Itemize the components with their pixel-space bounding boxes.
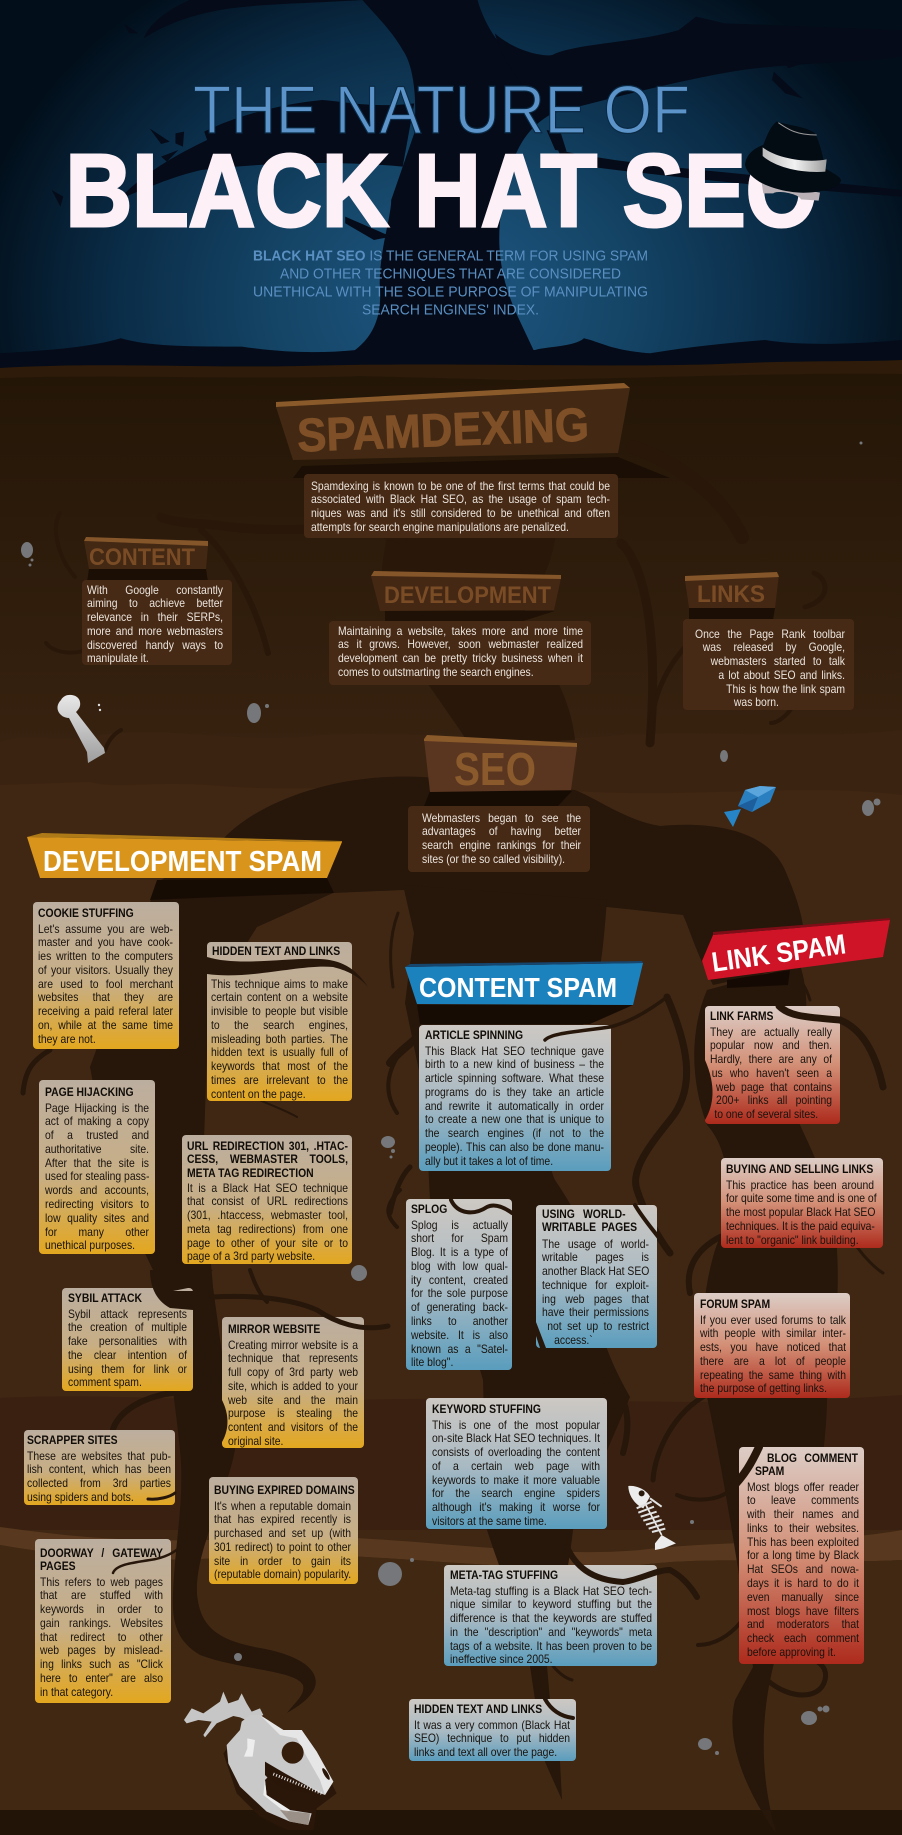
card: url redirection: META TAG REDIRECTION [186, 1166, 313, 1180]
card: doorway / gateway pages: in that category. [40, 1685, 113, 1699]
card: mirror website: original site. [228, 1434, 283, 1448]
card: forum spam: ests, you have noticed that [700, 1340, 846, 1354]
card: url redirection: It is a Black Hat SEO technique [186, 1180, 347, 1194]
sign: seo [424, 735, 577, 806]
card: hidden text and links: This technique aims to make [211, 976, 348, 990]
card: keyword stuffing: on-site Black Hat SEO techniques. It [432, 1431, 600, 1445]
card: blog comment spam: Hat SEOs and nowa- [747, 1562, 859, 1576]
card: splog: short for Spam [411, 1231, 508, 1245]
root tendrils [23, 913, 883, 1695]
text box: development [329, 621, 591, 685]
card: splog: known as a "Satel- [411, 1342, 508, 1356]
sign: content [84, 537, 208, 582]
card: cookie stuffing: ies written to the computers [38, 949, 173, 963]
card: using world-writable pages: ing web pages that [542, 1292, 649, 1306]
card: doorway / gateway pages [35, 1539, 171, 1703]
card: hidden text and links: invisible to people but visible [211, 1004, 348, 1018]
card: blog comment spam: SPAM [755, 1464, 784, 1478]
card: doorway / gateway pages: PAGES [40, 1559, 76, 1573]
intro paragraph [253, 248, 648, 318]
card: meta-tag stuffing: ineffective since 2005. [450, 1652, 553, 1666]
card: cookie stuffing: master and you have cook- [38, 935, 173, 949]
text box: content: more and more webmasters [87, 624, 223, 638]
card: url redirection: page to other of your site or to [186, 1236, 347, 1250]
card: using world-writable pages: WRITABLE PAGES [542, 1220, 637, 1234]
card: blog comment spam: and moderators that [747, 1617, 859, 1631]
card: sybil attack: fake personalities with [68, 1334, 187, 1348]
card: buying and selling links: lent to "organic" link building. [726, 1233, 859, 1247]
card: splog: SPLOG [411, 1202, 447, 1216]
card: doorway / gateway pages: here to enter" are also [40, 1671, 163, 1685]
card: hidden text and links: hidden text is usually full of [211, 1045, 348, 1059]
card: forum spam: there are a lot of people [700, 1354, 846, 1368]
card: doorway / gateway pages: ing links such as "Click [40, 1657, 163, 1671]
card: using world-writable pages: have their permissions [542, 1305, 649, 1319]
card: blog comment spam: This has been exploited [747, 1535, 859, 1549]
text box: development: Maintaining a website, takes more and more time [338, 624, 583, 638]
card: link farms: web page that contains [716, 1080, 832, 1094]
banner: link spam [702, 918, 890, 988]
card: article spinning: ARTICLE SPINNING [425, 1028, 523, 1042]
card: hidden text and links: times are irrelevant to the [211, 1073, 348, 1087]
icon: blue gem [724, 786, 776, 827]
card: using world-writable pages: USING WORLD- [542, 1206, 626, 1220]
card: hidden text and links (content spam): It was a very common (Black Hat [414, 1718, 570, 1732]
card: buying and selling links [721, 1158, 883, 1248]
card: cookie stuffing: receiving a paid referal later [38, 1004, 173, 1018]
icon: black fedora hat [745, 122, 841, 201]
card: scrapper sites [24, 1430, 175, 1505]
card: hidden text and links: misleading both parties. The [211, 1032, 348, 1046]
card: keyword stuffing: for the search engine spiders [432, 1486, 600, 1500]
card: page hijacking: act of making a copy [45, 1114, 149, 1128]
title line: the nature of: THE NATURE OF [193, 72, 690, 148]
card: buying and selling links: BUYING AND SELLING LINKS [726, 1162, 873, 1176]
card: doorway / gateway pages: gain rankings. Websites [40, 1616, 163, 1630]
card: buying expired domains: that has expired recently is [214, 1512, 351, 1526]
upper faint roots [46, 447, 825, 750]
card: using world-writable pages: another Black Hat SEO [542, 1264, 649, 1278]
card: page hijacking: After that the site is [45, 1156, 149, 1170]
card: using world-writable pages [536, 1205, 657, 1348]
card: buying expired domains: BUYING EXPIRED DOMAINS [214, 1482, 355, 1496]
card: forum spam: If you ever used forums to talk [700, 1312, 846, 1326]
card: meta-tag stuffing [444, 1565, 657, 1666]
text box: development: comes to outstmarting the search engines. [338, 665, 534, 679]
banner: development spam [27, 833, 342, 900]
sign: links [685, 572, 779, 620]
card: doorway / gateway pages: that are stuffed with [40, 1588, 163, 1602]
card: buying and selling links: This practice has been around [726, 1178, 874, 1192]
card: blog comment spam: BLOG COMMENT [767, 1450, 858, 1464]
card: keyword stuffing: although it's making it worse for [432, 1500, 600, 1514]
tree silhouette [0, 0, 902, 370]
card: page hijacking: used for stealing pass- [45, 1169, 149, 1183]
text box: content: relevance in their SERPs, [87, 610, 223, 624]
card: sybil attack: the creation of multiple [68, 1320, 187, 1334]
sign: development: DEVELOPMENT [384, 582, 551, 609]
card: blog comment spam: before approving it. [747, 1645, 836, 1659]
card: cookie stuffing: are used to fool merchant [38, 977, 173, 991]
banner: development spam: DEVELOPMENT SPAM [43, 846, 322, 878]
card: article spinning: This Black Hat SEO technique gave [425, 1044, 604, 1058]
text box: content: aiming to achieve better [87, 596, 223, 610]
card: mirror website: purpose is stealing the [228, 1406, 358, 1420]
card: blog comment spam: check each comment [747, 1631, 859, 1645]
text box: seo [408, 806, 590, 872]
card: cookie stuffing [33, 902, 179, 1049]
card: page hijacking [39, 1080, 155, 1254]
card: splog [406, 1199, 512, 1370]
card: forum spam: the purpose of getting links. [700, 1381, 827, 1395]
card: url redirection: (301, .htaccess, webmaster tool, [186, 1208, 347, 1222]
card: cookie stuffing: Let's assume you are web- [38, 922, 173, 936]
card: blog comment spam: to leave comments [747, 1493, 859, 1507]
text box: links: This is how the link spam [726, 682, 845, 696]
text box: content: manipulate it. [87, 651, 149, 665]
card: link farms: They are actually really [710, 1024, 832, 1038]
card: hidden text and links: certain content on a website [211, 990, 348, 1004]
sign: spamdexing [276, 383, 670, 478]
card: page hijacking: redirecting visitors to [45, 1197, 149, 1211]
card: sybil attack: using them for link or [68, 1362, 187, 1376]
card: forum spam: FORUM SPAM [700, 1296, 770, 1310]
card: keyword stuffing: This is one of the most popular [432, 1418, 600, 1432]
card: scrapper sites: using spiders and bots. [27, 1490, 134, 1504]
card: sybil attack: comment spam. [68, 1375, 142, 1389]
card: scrapper sites: lish content, which has been [27, 1462, 171, 1476]
banner: content spam [405, 961, 643, 1024]
card: splog: Blog. It is a type of [411, 1245, 508, 1259]
card: doorway / gateway pages: keywords in order to [40, 1602, 163, 1616]
card: blog comment spam: links to their websites. [747, 1521, 859, 1535]
intro paragraph: UNETHICAL WITH THE SOLE PURPOSE OF MANIPULATING [253, 284, 648, 300]
card: url redirection: page of a 3rd party website. [186, 1249, 315, 1263]
card: page hijacking: for many other [45, 1225, 149, 1239]
text box: spamdexing [304, 474, 618, 538]
text box: seo: Webmasters began to see the [422, 810, 581, 824]
text box: links: was released by Google, [703, 640, 845, 654]
card: hidden text and links [207, 942, 352, 1101]
card: keyword stuffing: KEYWORD STUFFING [432, 1402, 541, 1416]
lower main roots [90, 776, 838, 1835]
card: meta-tag stuffing: Meta-tag stuffing is a Black Hat SEO tech- [450, 1584, 652, 1598]
card: hidden text and links (content spam): SEO) technique to put hidden [414, 1731, 570, 1745]
text box: content [82, 580, 232, 665]
sign: seo: SEO [454, 743, 536, 795]
card: hidden text and links (content spam): links and text all over the page. [414, 1745, 557, 1759]
text box: development: as it grows. However, soon webmaster realized [338, 637, 583, 651]
card: scrapper sites: SCRAPPER SITES [27, 1432, 118, 1446]
card: page hijacking: words and accounts, [45, 1183, 149, 1197]
intro paragraph: SEARCH ENGINES' INDEX. [362, 302, 539, 318]
card: doorway / gateway pages: web pages by mislead- [40, 1643, 163, 1657]
card: buying expired domains: 301 redirect) to point to other [214, 1540, 351, 1554]
card: article spinning: programs do is they take an article [425, 1085, 604, 1099]
card: sybil attack: Sybil attack represents [68, 1306, 187, 1320]
card: splog: lite blog". [411, 1355, 453, 1369]
card: page hijacking: unethical purposes. [45, 1238, 135, 1252]
card: meta-tag stuffing: tags of a website. It has been proven to be [450, 1639, 652, 1653]
card: mirror website: content and visitors of the [228, 1420, 358, 1434]
card: link farms: LINK FARMS [710, 1008, 773, 1022]
card: sybil attack: the clear intention of [68, 1348, 187, 1362]
card: using world-writable pages: access.` [554, 1333, 593, 1347]
card: blog comment spam [739, 1447, 864, 1664]
card: buying and selling links: techniques. It is the paid equiva- [726, 1219, 875, 1233]
card: keyword stuffing: consists of overloading the content [432, 1445, 600, 1459]
card: doorway / gateway pages: DOORWAY / GATEWAY [40, 1546, 163, 1560]
card: using world-writable pages: The usage of world- [542, 1236, 649, 1250]
sign: links: LINKS [697, 581, 765, 608]
card: splog: ity content, created [411, 1273, 508, 1287]
card: url redirection: CESS, WEBMASTER TOOLS, [186, 1152, 347, 1166]
card: url redirection: meta tag redirections) from one [186, 1222, 347, 1236]
card: hidden text and links: to the search engines, [211, 1018, 348, 1032]
card: cookie stuffing: COOKIE STUFFING [38, 906, 134, 920]
text box: seo: sites (or the so called visibility). [422, 852, 565, 866]
card: article spinning: birth to a new kind of business – the [425, 1057, 604, 1071]
text box: content: discovered handy ways to [87, 638, 223, 652]
text box: development: development can be pretty tricky business when it [338, 651, 583, 665]
card: link farms: 200+ links all pointing [716, 1093, 832, 1107]
card: sybil attack: SYBIL ATTACK [68, 1290, 142, 1304]
text box: links: was born. [734, 695, 779, 709]
card: mirror website: web site and the main [228, 1393, 358, 1407]
icon: dinosaur skull [184, 1692, 337, 1830]
card: splog: links to another [411, 1314, 508, 1328]
card: page hijacking: Page Hijacking is the [45, 1100, 149, 1114]
sign: development [371, 571, 561, 622]
card: mirror website: full copy of 3rd party web [228, 1365, 358, 1379]
intro paragraph: BLACK HAT SEO IS THE GENERAL TERM FOR USING SPAM [253, 248, 648, 264]
sign: spamdexing: SPAMDEXING [296, 397, 590, 462]
card: url redirection: URL REDIRECTION 301, .HTAC- [186, 1138, 347, 1152]
text box: seo: search engine rankings for their [422, 838, 581, 852]
card: splog: blog with low qual- [411, 1259, 508, 1273]
card: scrapper sites: These are websites that pub- [27, 1448, 171, 1462]
card: meta-tag stuffing: in the "description" and "keywords" meta [450, 1625, 652, 1639]
card: forum spam [694, 1293, 850, 1398]
card: hidden text and links: keywords that most of the [211, 1059, 348, 1073]
sign: content: CONTENT [89, 544, 195, 571]
card: blog comment spam: with their names and [747, 1507, 859, 1521]
icon: bone [57, 695, 105, 763]
card: mirror website: site, which is added to your [228, 1379, 358, 1393]
card: keyword stuffing: visitors at the same time. [432, 1514, 547, 1528]
card: forum spam: with people with similar inter- [700, 1326, 846, 1340]
card: article spinning [419, 1025, 611, 1171]
card: meta-tag stuffing: difference is that the keywords are stuffed [450, 1611, 652, 1625]
card: page hijacking: of a trusted and [45, 1128, 149, 1142]
card: splog: website. It is also [411, 1328, 508, 1342]
card: splog: of generating back- [411, 1300, 508, 1314]
text box: spamdexing: Spamdexing is known to be one of the first terms that could be [311, 478, 610, 492]
card: splog: Splog is actually [411, 1218, 508, 1232]
card: page hijacking: low quality sites and [45, 1211, 149, 1225]
text box: links: webmasters started to talk [711, 654, 845, 668]
card: keyword stuffing: keywords to make it more valuable [432, 1473, 600, 1487]
card: scrapper sites: collected from 3rd parties [27, 1476, 171, 1490]
card: splog: for the sole purpose [411, 1286, 508, 1300]
stones [21, 442, 880, 1755]
text box: content: With Google constantly [87, 582, 223, 596]
card: doorway / gateway pages: This refers to web pages [40, 1574, 163, 1588]
card: blog comment spam: even manually since [747, 1590, 859, 1604]
text box: spamdexing: attempts for search engine manipulations are penalized. [311, 520, 569, 534]
text box: links [683, 619, 854, 710]
text box: links: a lot about SEO and links. [718, 668, 845, 682]
card: forum spam: repeating the same thing with [700, 1368, 846, 1382]
card: blog comment spam: for a long time by Black [747, 1548, 859, 1562]
card: article spinning: and rewrite it automatically in order [425, 1099, 604, 1113]
card: article spinning: article spinning software. What these [425, 1071, 604, 1085]
text box: seo: advantages of having better [422, 824, 581, 838]
card: mirror website: technique that represents [228, 1351, 358, 1365]
card: article spinning: ally but it takes a lot of time. [425, 1154, 553, 1168]
card: article spinning: to create a new one that is unique to [425, 1112, 604, 1126]
card: article spinning: the search engines (if not to the [425, 1126, 604, 1140]
card: cookie stuffing: websites that they are [38, 990, 173, 1004]
card: cookie stuffing: of your visitors. Usually they [38, 963, 173, 977]
text box: spamdexing: niques was and it's still considered to be unethical and often [311, 506, 610, 520]
card: link farms [705, 1006, 840, 1124]
card: cookie stuffing: on, while at the same time [38, 1018, 173, 1032]
card: using world-writable pages: writable pages is [542, 1250, 649, 1264]
card: buying expired domains: site in order to gain its [214, 1554, 351, 1568]
card: blog comment spam: most blogs have filters [747, 1604, 859, 1618]
card: doorway / gateway pages: that redirect to other [40, 1630, 163, 1644]
icon: fish skeleton [628, 1486, 676, 1550]
card: mirror website: MIRROR WEBSITE [228, 1322, 320, 1336]
card: blog comment spam: Most blogs offer reader [747, 1480, 859, 1494]
card: url redirection: that consist of URL redirections [186, 1194, 347, 1208]
card: url redirection [182, 1135, 352, 1264]
card: link farms: popular now and then. [710, 1038, 832, 1052]
card: buying expired domains: purchased and set up (with [214, 1526, 351, 1540]
card: meta-tag stuffing: META-TAG STUFFING [450, 1568, 558, 1582]
card: hidden text and links (content spam) [409, 1699, 576, 1761]
card: using world-writable pages: not set up to restrict [547, 1319, 649, 1333]
card: article spinning: people). This can also be done manu- [425, 1140, 604, 1154]
card: buying expired domains [209, 1477, 358, 1584]
card: keyword stuffing [426, 1398, 607, 1529]
card: sybil attack [62, 1288, 193, 1391]
card: hidden text and links: content on the page. [211, 1087, 306, 1101]
card: cookie stuffing: they are not. [38, 1032, 96, 1046]
banner: content spam: CONTENT SPAM [419, 972, 617, 1003]
card: link farms: to one of several sites. [714, 1107, 818, 1121]
card: buying expired domains: (reputable domain) popularity. [214, 1567, 351, 1581]
card: buying and selling links: for quite some time and is one of [726, 1191, 877, 1205]
title line: black hat seo: BLACK HAT SEO [66, 133, 818, 248]
card: page hijacking: PAGE HIJACKING [45, 1084, 134, 1098]
text box: spamdexing: associated with Black Hat SEO, as the usage of spam tech- [311, 492, 610, 506]
intro paragraph: AND OTHER TECHNIQUES THAT ARE CONSIDERED [280, 266, 621, 282]
card: buying and selling links: the most popular Black Hat SEO [726, 1205, 875, 1219]
card: page hijacking: authoritative site. [45, 1142, 149, 1156]
card: hidden text and links (content spam): HIDDEN TEXT AND LINKS [414, 1702, 542, 1716]
text box: links: Once the Page Rank toolbar [695, 626, 845, 640]
card: link farms: Hardly, there are any of [710, 1052, 832, 1066]
card: using world-writable pages: technique for exploit- [542, 1278, 649, 1292]
card: blog comment spam: days it is hard to do it [747, 1576, 859, 1590]
card: link farms: us who haven't seen a [712, 1066, 832, 1080]
card: mirror website [222, 1317, 364, 1448]
card: buying expired domains: It's when a reputable domain [214, 1498, 351, 1512]
card: meta-tag stuffing: nique similar to keyword stuffing but the [450, 1597, 652, 1611]
card: hidden text and links: HIDDEN TEXT AND LINKS [212, 944, 340, 958]
banner: link spam: LINK SPAM [710, 928, 848, 978]
card: mirror website: Creating mirror website is a [228, 1338, 358, 1352]
card: keyword stuffing: of a certain web page with [432, 1459, 600, 1473]
